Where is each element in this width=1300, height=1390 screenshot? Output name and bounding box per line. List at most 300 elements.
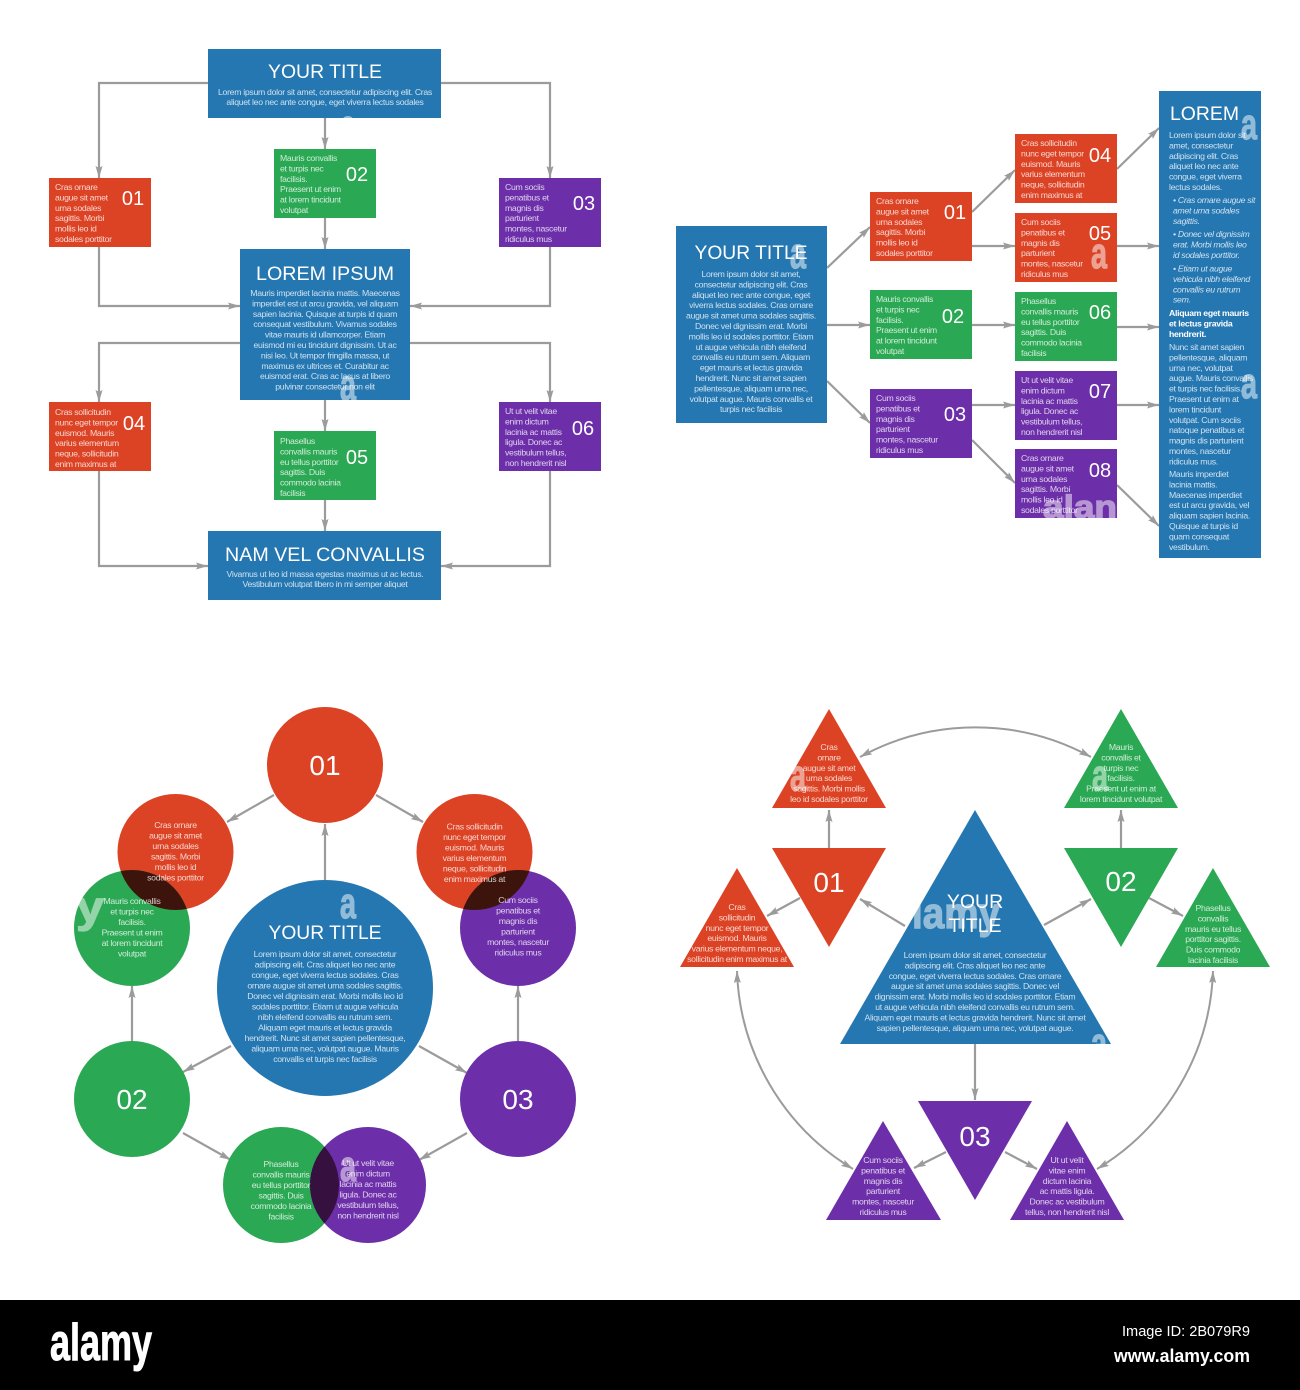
column: lorem: amet urna sodales [1173, 205, 1240, 215]
text: red circle left: urna sodales [152, 841, 200, 851]
box: tree 02: Mauris convallis [876, 294, 934, 304]
box: your title: volutpat augue. Mauris convallis et [690, 394, 813, 404]
circle: bottom green and purple pair: Ut ut velit vitae [342, 1158, 394, 1168]
column: lorem: lorem tincidunt [1169, 404, 1222, 414]
box: nam vel convallis [208, 531, 441, 600]
box: step 03: ridiculus mus [505, 234, 553, 244]
box: tree 05: Cum sociis [1021, 217, 1061, 227]
column: lorem: natoque penatibus et [1169, 425, 1245, 435]
watermark: stock marks over panels: a [1091, 1019, 1107, 1068]
box: step 01: Cras ornare [55, 182, 98, 192]
box: step 06: Ut ut velit vitae [505, 406, 557, 416]
column: lorem: id sodales porttitor. [1173, 250, 1240, 260]
footer: black stock image bar [0, 1300, 1300, 1390]
box: tree 03 [870, 389, 972, 458]
column: lorem: • Cras ornare augue sit [1173, 195, 1256, 205]
triangle: green top text: turpis nec [1104, 763, 1139, 773]
text: green circle: volutpat [118, 948, 147, 958]
box: tree 07 [1015, 371, 1117, 440]
box: step 06: lacinia ac mattis [505, 427, 563, 437]
triangle: purple left text: ridiculus mus [860, 1207, 907, 1217]
column: lorem: augue. Mauris convallis [1169, 373, 1254, 383]
box: tree 06: Phasellus [1021, 296, 1057, 306]
watermark: stock marks over panels: a [1092, 751, 1108, 800]
box: tree 04: enim maximus at [1021, 190, 1083, 200]
box: tree 08: mollis leo id [1021, 495, 1063, 505]
text: purple circle: Cum sociis [498, 895, 539, 905]
box: tree 05: ridiculus mus [1021, 269, 1069, 279]
circle: number 02: 02 [116, 1084, 148, 1115]
triangle: red top text: Cras [820, 742, 839, 752]
triangle: green top text: Mauris [1109, 742, 1134, 752]
triangle: green right text: porttitor sagittis. [1185, 934, 1241, 944]
box: step 05: sagittis. Duis [280, 467, 326, 477]
box: tree 01 [870, 192, 972, 261]
box: your title: augue sit amet urna sodales sagittis. [686, 311, 816, 321]
box: lorem ipsum: nisi leo. Ut tempor fringilla massa, ut [261, 350, 390, 360]
circle: bottom green and purple pair: facilisis [268, 1212, 295, 1222]
connectors: box flowchart arrows [99, 83, 550, 566]
circle: central your title: YOUR TITLE [268, 922, 382, 944]
triangle: central your title: Lorem ipsum dolor sit amet, consectetur [904, 950, 1047, 960]
box: tree 06: sagittis. Duis [1021, 327, 1067, 337]
watermark: stock marks over panels: a [1241, 100, 1257, 149]
box: tree 08: urna sodales [1021, 474, 1068, 484]
text: red circle left: sodales porttitor [147, 872, 204, 882]
text: purple circle: parturient [501, 926, 536, 936]
column: lorem: hendrerit. [1169, 329, 1206, 339]
triangle: green right text: lacinia facilisis [1188, 955, 1239, 965]
triangle: green right text [1156, 868, 1270, 967]
text: purple circle: montes, nascetur [487, 937, 549, 947]
circle: bottom green and purple pair [223, 1127, 426, 1243]
watermark: stock marks over panels: a [340, 361, 356, 410]
column: lorem: et lectus gravida [1169, 318, 1233, 328]
box: step 03: parturient [505, 213, 540, 223]
box: tree 01: mollis leo id [876, 238, 918, 248]
box: tree 01: Cras ornare [876, 196, 919, 206]
column: lorem: amet, consectetur [1169, 140, 1233, 150]
circle: central your title: Donec vel dignissim erat. Morbi mollis leo id [247, 991, 403, 1001]
box: step 03: 03 [573, 193, 595, 215]
box: step 04: enim maximus at [55, 459, 117, 469]
column: lorem: vehicula nibh eleifend [1173, 274, 1251, 284]
box: tree 03: parturient [876, 424, 911, 434]
text: green circle: at lorem tincidunt [102, 938, 163, 948]
footer: black stock image bar: www.alamy.com [1113, 1346, 1250, 1366]
triangle: red top text: sagittis. Morbi mollis [793, 784, 866, 794]
box: tree 02: facilisis. [876, 315, 903, 325]
triangle: purple right text: tellus, non hendrerit nisl [1025, 1207, 1109, 1217]
box: step 01 [49, 178, 151, 247]
triangle: central your title: dignissim erat. Morbi mollis leo id sodales porttitor. Etiam [875, 992, 1075, 1002]
circle: number 03 [460, 1041, 576, 1157]
circle: bottom green and purple pair: commodo lacinia [251, 1201, 312, 1211]
text: green circle: Praesent ut enim [102, 928, 162, 938]
box: tree 01: augue sit amet [876, 206, 930, 216]
column: lorem: Aliquam eget mauris [1169, 308, 1249, 318]
box: tree 07: 07 [1089, 381, 1111, 403]
box: tree 08: sodales porttitor [1021, 505, 1078, 515]
box: step 06: ligula. Donec ac [505, 437, 563, 447]
column: lorem: Praesent ut enim at [1169, 394, 1240, 404]
box: tree 07: vestibulum tellus, [1021, 417, 1082, 427]
box: tree 05: penatibus et [1021, 227, 1066, 237]
box: tree 06: convallis mauris [1021, 306, 1079, 316]
triangle: red top text: augue sit amet [803, 763, 856, 773]
circle: central your title: aliquam urna nec, volutpat augue. Mauris [251, 1044, 400, 1054]
watermark: stock marks over panels: a [1241, 359, 1257, 408]
triangle: purple right text: Ut ut velit [1051, 1155, 1084, 1165]
circle: bottom green and purple pair: ligula. Donec ac [339, 1190, 397, 1200]
box: tree 08: augue sit amet [1021, 463, 1075, 473]
column: lorem: vestibulum. [1169, 542, 1210, 552]
box: tree 07: non hendrerit nisl [1021, 427, 1083, 437]
column: lorem: sem. [1173, 295, 1191, 305]
triangle: green top text: convallis et [1101, 752, 1142, 762]
box: step 03: montes, nascetur [505, 224, 567, 234]
column: lorem: volutpat. Cum sociis [1169, 415, 1242, 425]
watermark: stock marks over panels: a [1091, 229, 1107, 278]
box: tree 05: magnis dis [1021, 238, 1060, 248]
box: step 03: magnis dis [505, 203, 544, 213]
box: tree 05: 05 [1089, 223, 1111, 245]
triangle: number 02 [1064, 848, 1178, 947]
text: red circle right: nunc eget tempor [443, 832, 506, 842]
box: nam vel convallis: NAM VEL CONVALLIS [225, 544, 425, 566]
text: purple circle: ridiculus mus [495, 948, 542, 958]
box: your title: Donec vel dignissim erat. Morbi [695, 321, 807, 331]
box: lorem ipsum: sapien lacinia. Quisque at turpis id quam [253, 309, 397, 319]
box: your title: turpis nec facilisis [720, 404, 783, 414]
text: red circle right: enim maximus at [444, 874, 506, 884]
circle: number 02 [74, 1041, 190, 1157]
triangle: central your title: TITLE [948, 915, 1002, 937]
column: lorem: lacinia mattis. [1169, 479, 1217, 489]
box: lorem ipsum: maximus ex ultrices et. Curabitur ac [261, 361, 390, 371]
column: lorem [1159, 91, 1261, 558]
watermark: stock marks over panels [76, 100, 1257, 1191]
box: step 01: augue sit amet [55, 192, 109, 202]
triangle: red top text: leo id sodales porttitor [790, 794, 868, 804]
triangle: green top text: lorem tincidunt volutpat [1080, 794, 1163, 804]
triangle: red left text [680, 868, 794, 967]
box: tree 08 [1015, 449, 1117, 518]
box: step 02: Mauris convallis [280, 153, 338, 163]
circle: central your title: Lorem ipsum dolor sit amet, consectetur [254, 949, 397, 959]
box: your title: consectetur adipiscing elit. Cras [695, 279, 808, 289]
circle: red text right [416, 794, 532, 910]
box: lorem ipsum: consequat vestibulum. Vivamus sodales [253, 319, 398, 329]
text: green circle: et turpis nec [110, 906, 155, 916]
box: lorem ipsum: imperdiet est ut arcu gravida, vel aliquam [252, 298, 398, 308]
overlap: red and purple [463, 870, 530, 910]
box: step 02: Praesent ut enim [280, 184, 341, 194]
circle: bottom green and purple pair: sagittis. Duis [258, 1190, 304, 1200]
box: tree 07: lacinia ac mattis [1021, 396, 1079, 406]
box: step 06 [499, 402, 601, 471]
box: your title: hendrerit. Nunc sit amet sapien [696, 373, 807, 383]
circle: green text [74, 870, 190, 986]
triangle: purple left text: magnis dis [864, 1176, 903, 1186]
triangle: number 01 [772, 848, 886, 947]
triangle: purple left text: penatibus et [861, 1165, 906, 1175]
box: your title: YOUR TITLE [268, 61, 382, 83]
box: tree 02: volutpat [876, 346, 905, 356]
box: tree 04: euismod. Mauris [1021, 159, 1081, 169]
box: tree 02 [870, 290, 972, 359]
box: tree 01: sodales porttitor [876, 248, 933, 258]
column: lorem: magnis dis parturient [1169, 436, 1244, 446]
connectors: circle diagram arrows [132, 795, 518, 1160]
circle: central your title: nibh eleifend convallis eu rutrum sem. [258, 1012, 392, 1022]
box: your title: ut augue vehicula nibh eleifend [696, 342, 807, 352]
box: tree 01: sagittis. Morbi [876, 227, 925, 237]
box: step 02: at lorem tincidunt [280, 195, 342, 205]
box: step 05: commodo lacinia [280, 478, 341, 488]
box: step 02: facilisis. [280, 174, 307, 184]
box: step 02 [274, 149, 376, 218]
triangle: purple right text: Donec ac vestibulum [1030, 1197, 1105, 1207]
box: step 04: 04 [123, 413, 145, 435]
triangle: purple right text: dictum lacinia [1043, 1176, 1092, 1186]
watermark: stock marks over panels: a [790, 229, 806, 278]
text: purple circle: penatibus et [496, 906, 541, 916]
box: lorem ipsum: euismod erat. Cras ac lacus at libero [260, 371, 390, 381]
box: step 01: sodales porttitor [55, 234, 112, 244]
connectors: tree flowchart arrows [827, 128, 1159, 526]
box: tree 03: Cum sociis [876, 393, 916, 403]
circle: purple text [460, 870, 576, 986]
box: step 01: 01 [122, 188, 144, 210]
box: tree 02: 02 [942, 306, 964, 328]
triangle: purple left text: Cum sociis [863, 1155, 904, 1165]
overlap: red and green [120, 870, 187, 910]
box: tree 07: ligula. Donec ac [1021, 406, 1079, 416]
column: lorem: congue, eget viverra [1169, 172, 1242, 182]
column: lorem: • Etiam ut augue [1173, 264, 1233, 274]
text: red circle right: varius elementum [443, 853, 506, 863]
triangle: purple left text [826, 1121, 941, 1220]
circle: red text left [118, 794, 234, 910]
watermark: stock marks over panels: a [340, 879, 356, 928]
box: step 04: euismod. Mauris [55, 428, 115, 438]
box: step 04 [49, 402, 151, 471]
text: red circle left: sagittis. Morbi [151, 852, 200, 862]
box: tree 08: Cras ornare [1021, 453, 1064, 463]
box: your title: viverra lectus sodales. Cras ornare [689, 300, 813, 310]
circle: bottom green and purple pair: eu tellus porttitor [252, 1180, 311, 1190]
box: step 05 [274, 431, 376, 500]
watermark: stock marks over panels: alan [1043, 489, 1117, 525]
circle: central your title: sodales porttitor. Etiam ut augue vehicula [252, 1002, 399, 1012]
box: step 04: nunc eget tempor [55, 417, 118, 427]
box: your title: YOUR TITLE [694, 242, 808, 264]
circle: number 01 [267, 707, 383, 823]
box: your title: aliquet leo nec ante congue, eget [692, 290, 811, 300]
column: lorem: urna nec, volutpat [1169, 363, 1234, 373]
watermark: stock marks over panels: lamy [912, 889, 1000, 938]
box: nam vel convallis: Vestibulum volutpat libero in mi semper aliquet [242, 579, 408, 589]
box: tree 06: commodo lacinia [1021, 338, 1082, 348]
box: tree 08: 08 [1089, 460, 1111, 482]
triangle: red top text [772, 709, 886, 808]
triangle: purple right text [1010, 1121, 1124, 1220]
column: lorem: et turpis nec facilisis. [1169, 384, 1242, 394]
box: your title: eget mauris et lectus gravida [700, 363, 803, 373]
circle: number 01: 01 [309, 750, 341, 781]
box: your title: pellentesque, aliquam urna nec, [694, 383, 808, 393]
circle: bottom green and purple pair: lacinia ac mattis [340, 1179, 397, 1189]
box: step 06: 06 [572, 418, 594, 440]
text: red circle right: Cras sollicitudin [447, 822, 503, 832]
circle: central your title: hendrerit. Nunc sit amet sapien pellentesque, [245, 1033, 405, 1043]
box: tree 07: Ut ut velit vitae [1021, 375, 1073, 385]
box: tree 05 [1015, 213, 1117, 282]
box: tree 03: magnis dis [876, 414, 915, 424]
triangle: red left text: sollicitudin [719, 912, 756, 922]
triangle: purple left text: parturient [866, 1186, 901, 1196]
circle: number 03: 03 [502, 1084, 534, 1115]
circle: central your title: ornare augue sit amet urna sodales sagittis. [247, 980, 403, 990]
box: tree 06: facilisis [1021, 348, 1047, 358]
column: lorem: montes, nascetur [1169, 446, 1231, 456]
circle: central your title: Aliquam eget mauris et lectus gravida [258, 1022, 392, 1032]
text: red circle right: euismod. Mauris [445, 842, 505, 852]
panel: box flowchart [49, 49, 601, 600]
box: step 05: facilisis [280, 488, 306, 498]
box: tree 03: penatibus et [876, 403, 921, 413]
box: tree 08: sagittis. Morbi [1021, 484, 1070, 494]
triangle: red top text: ornare [817, 752, 841, 762]
watermark: stock marks over panels: a [340, 101, 356, 150]
text: purple circle: magnis dis [499, 916, 538, 926]
triangle: purple left text: montes, nascetur [852, 1197, 914, 1207]
box: tree 03: 03 [944, 404, 966, 426]
box: tree 06: eu tellus porttitor [1021, 317, 1080, 327]
triangle: purple right text: vitae enim [1049, 1165, 1085, 1175]
column: lorem: quam consequat [1169, 531, 1230, 541]
box: lorem ipsum: Mauris imperdiet lacinia mattis. Maecenas [250, 288, 401, 298]
triangle: number 03 [918, 1101, 1032, 1200]
circle: central your title [217, 880, 433, 1096]
box: tree 06 [1015, 292, 1117, 361]
box: tree 04: 04 [1089, 145, 1111, 167]
box: tree 01: urna sodales [876, 217, 923, 227]
box: step 04: varius elementum [55, 438, 119, 448]
column: lorem: • Donec vel dignissim [1173, 229, 1249, 239]
box: step 01: mollis leo id [55, 224, 97, 234]
circle: bottom green and purple pair: non hendrerit nisl [337, 1210, 399, 1220]
box: step 02: volutpat [280, 205, 309, 215]
triangle: red left text: nunc eget tempor [706, 923, 769, 933]
box: tree 04: neque, sollicitudin [1021, 180, 1085, 190]
box: tree 01: 01 [944, 202, 966, 224]
box: tree 04: nunc eget tempor [1021, 148, 1084, 158]
triangle: green right text: convallis [1198, 913, 1229, 923]
triangle: green right text: Duis commodo [1186, 945, 1241, 955]
box: tree 04: Cras sollicitudin [1021, 138, 1077, 148]
circle: central your title: adipiscing elit. Cras aliquet leo nec ante [255, 960, 396, 970]
triangle: red top text: urna sodales [806, 773, 853, 783]
footer: black stock image bar: Image ID: 2B079R9 [1122, 1323, 1250, 1340]
box: step 02: 02 [346, 164, 368, 186]
triangle: number 01: 01 [813, 867, 845, 898]
column: lorem: lectus sodales. [1169, 182, 1222, 192]
box: tree 02: et turpis nec [876, 304, 920, 314]
column: lorem: Lorem ipsum dolor sit [1169, 130, 1247, 140]
box: your title: aliquet leo nec ante congue, eget viverra lectus sodales [226, 97, 425, 107]
box: step 02: et turpis nec [280, 163, 324, 173]
box: tree 04 [1015, 134, 1117, 203]
column: lorem: Nunc sit amet sapien [1169, 342, 1245, 352]
box: your title: Lorem ipsum dolor sit amet, consectetur adipiscing elit. Cras [218, 87, 433, 97]
box: your title: convallis eu rutrum sem. Aliquam [692, 352, 810, 362]
box: tree 07: enim dictum [1021, 385, 1065, 395]
column: lorem: convallis eu rutrum [1173, 284, 1240, 294]
box: tree 03: montes, nascetur [876, 435, 938, 445]
box: lorem ipsum: pulvinar consectetur non elit [275, 382, 376, 392]
column: lorem: aliquet leo nec ante [1169, 161, 1239, 171]
box: tree 05: parturient [1021, 248, 1056, 258]
box: your title: Lorem ipsum dolor sit amet, [701, 269, 801, 279]
triangle: central your title: ut augue vehicula nibh eleifend convallis eu rutrum sem. [875, 1002, 1075, 1012]
box: nam vel convallis: Vivamus ut leo id massa egestas maximus ut ac lectus. [227, 569, 423, 579]
box: tree 03: ridiculus mus [876, 445, 924, 455]
box: step 01: urna sodales [55, 203, 102, 213]
connectors: triangle diagram arrows [737, 727, 1213, 1169]
text: red circle left: Cras ornare [154, 820, 197, 830]
triangle: red left text: Cras [728, 902, 747, 912]
text: red circle left: mollis leo id [155, 862, 197, 872]
panel: circle diagram [74, 707, 576, 1243]
panel: triangle diagram [680, 709, 1270, 1220]
column: lorem: Mauris imperdiet [1169, 469, 1229, 479]
triangle: central your title: congue, eget viverra lectus sodales. Cras ornare [889, 971, 1062, 981]
box: lorem ipsum [240, 249, 410, 400]
triangle: red left text: sollicitudin enim maximus at [687, 954, 788, 964]
triangle: green right text: mauris eu tellus [1185, 924, 1242, 934]
circle: bottom green and purple pair: Phasellus [264, 1159, 299, 1169]
box: step 03 [499, 178, 601, 247]
box: lorem ipsum: LOREM IPSUM [256, 263, 394, 285]
box: step 06: non hendrerit nisl [505, 458, 567, 468]
box: tree 02: at lorem tincidunt [876, 336, 938, 346]
triangle: green top text [1064, 709, 1178, 808]
box: step 05: convallis mauris [280, 446, 338, 456]
circle: bottom green and purple pair: enim dictum [346, 1168, 390, 1178]
box: lorem ipsum: vitae mauris id ullamcorper. Etiam [265, 330, 385, 340]
column: lorem: Quisque at turpis id [1169, 521, 1238, 531]
column: lorem: erat. Morbi mollis leo [1173, 239, 1247, 249]
watermark: stock marks over panels: y [76, 883, 105, 932]
triangle: central your title: augue sit amet urna sodales sagittis. Donec vel [891, 981, 1059, 991]
box: step 06: enim dictum [505, 416, 549, 426]
circle: central your title: convallis et turpis nec facilisis [273, 1054, 378, 1064]
circle: bottom green and purple pair: vestibulum tellus, [337, 1200, 399, 1210]
triangle: central your title: YOUR [947, 891, 1003, 913]
box: step 03: Cum sociis [505, 182, 545, 192]
box: tree 04: varius elementum [1021, 169, 1085, 179]
column: lorem: aliquam sapien lacinia. [1169, 511, 1250, 521]
text: red circle left: augue sit amet [149, 830, 203, 840]
text: green circle: Mauris convallis [104, 896, 161, 906]
box: step 01: sagittis. Morbi [55, 213, 104, 223]
box: step 05: 05 [346, 447, 368, 469]
box: your title: mollis leo id sodales porttitor. Etiam [689, 331, 813, 341]
box: your title [208, 49, 441, 118]
column: lorem: adipiscing elit. Cras [1169, 151, 1239, 161]
